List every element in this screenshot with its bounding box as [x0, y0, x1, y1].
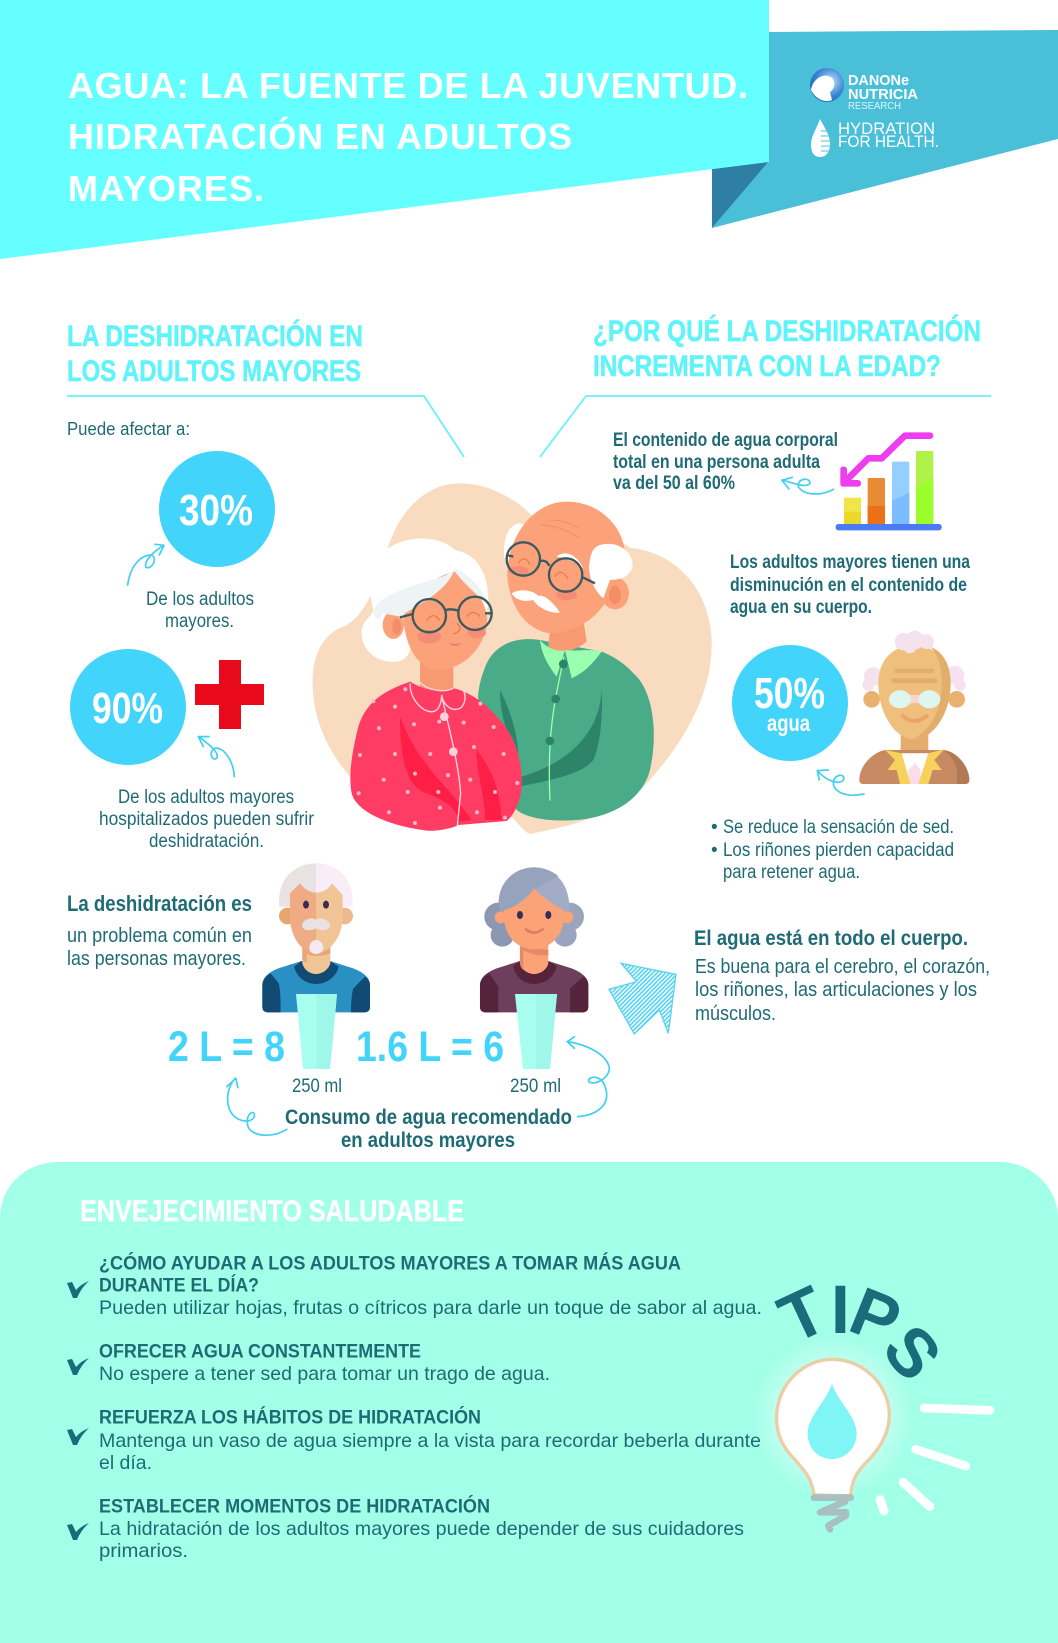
tip 1: ¿CÓMO AYUDAR A LOS ADULTOS MAYORES A TOMAR MÁS AGUA: [99, 1250, 681, 1274]
arrow: to 30%: [128, 544, 164, 585]
panel: envejecimiento saludable: [0, 1162, 1058, 1643]
heading: la deshidratación: [67, 319, 363, 388]
check mark: [67, 1523, 89, 1540]
lettering: TIPS: [768, 1272, 956, 1395]
text: hospitalizados: [99, 787, 315, 852]
text: hospitalizados: deshidratación.: [149, 831, 264, 852]
tip 3: REFUERZA LOS HÁBITOS DE HIDRATACIÓN: [99, 1404, 481, 1428]
cyan title band: [0, 0, 769, 259]
text: de los adultos mayores: mayores.: [165, 611, 234, 632]
check mark: [67, 1358, 89, 1375]
numbers: 2 L = 8: 2 L = 8: [168, 1023, 285, 1071]
text: disminución de agua: agua en su cuerpo.: [730, 597, 872, 618]
lettering: TIPS: S: [868, 1311, 956, 1395]
tip 2: OFRECER AGUA CONSTANTEMENTE: [99, 1340, 421, 1362]
text: el agua está en todo el cuerpo: [694, 926, 990, 1025]
text: de los adultos mayores: De los adultos: [146, 589, 254, 610]
icon: elderly man bust: [262, 863, 370, 1012]
tip 4: primarios.: [99, 1540, 188, 1562]
logo: Danone Nutricia Research: DANONe: [848, 72, 909, 89]
water drop: [808, 1383, 857, 1459]
numbers: 1.6 L = 6: 1.6 L = 6: [356, 1023, 504, 1071]
text: problema común: un problema común en: [67, 925, 252, 947]
title: AGUA: LA FUENTE DE LA JUVENTUD.: [68, 65, 748, 106]
text: problema común: La deshidratación es: [67, 891, 252, 916]
text: el agua está en todo el cuerpo: El agua está en todo el cuerpo.: [694, 926, 968, 950]
arrow: man to circle: [817, 770, 864, 795]
logo: Hydration for Health: FOR HEALTH.: [838, 132, 939, 151]
header banner: [0, 0, 1058, 259]
stat circle: 90%: 90%: [92, 684, 163, 733]
grandmother: [350, 539, 522, 831]
text: de los adultos mayores: [146, 589, 254, 632]
arrow: to 90%: [198, 737, 234, 777]
heading: envejecimiento saludable: ENVEJECIMIENTO SALUDABLE: [80, 1195, 464, 1228]
title: MAYORES.: [68, 168, 264, 209]
tip 4: [67, 1494, 744, 1562]
stat circle: 50% agua: 50%: [754, 669, 825, 718]
tip 4: La hidratación de los adultos mayores puede depender de sus cuidadores: [99, 1518, 744, 1540]
heading: la deshidratación: LOS ADULTOS MAYORES: [67, 355, 361, 388]
text: el agua está en todo el cuerpo: los riñones, las articulaciones y los: [695, 979, 977, 1001]
text: consumo recomendado: Consumo de agua recomendado: [285, 1105, 572, 1129]
text: problema común: las personas mayores.: [67, 948, 246, 970]
bullet list: causes: para retener agua.: [723, 862, 860, 883]
tip 3: Mantenga un vaso de agua siempre a la vista para recordar beberla durante: [99, 1430, 761, 1452]
illustration: tips light bulb: [751, 1272, 990, 1529]
bullet list: causes: Se reduce la sensación de sed.: [723, 817, 954, 838]
lettering: TIPS: T: [768, 1272, 838, 1358]
text: consumo recomendado: [285, 1105, 572, 1152]
text: consumo recomendado: en adultos mayores: [341, 1128, 515, 1152]
check mark: [67, 1281, 89, 1298]
light rays: [880, 1408, 990, 1511]
logo: Hydration for Health: [811, 119, 939, 157]
stat circle: 30%: 30%: [179, 486, 253, 535]
illustration: elderly couple: [313, 483, 712, 834]
icon: bar chart with falling arrow: [836, 436, 942, 530]
bullet list: causes: •: [711, 817, 718, 838]
text: contenido de agua corporal: total en una persona adulta: [613, 452, 820, 473]
icon: elderly man with glasses: [859, 631, 969, 784]
peach blob: [313, 483, 712, 834]
logos: [810, 68, 939, 157]
bullet list: causes: Los riñones pierden capacidad: [723, 840, 954, 861]
bulb glow: [751, 1335, 914, 1498]
check mark: [67, 1428, 89, 1445]
text: el agua está en todo el cuerpo: Es buena para el cerebro, el corazón,: [695, 956, 990, 978]
grandfather: [478, 502, 654, 821]
arrow: right curl: [567, 1037, 609, 1117]
heading: por qué: [593, 314, 981, 383]
icon: water glass 2: [515, 994, 557, 1069]
text: disminución de agua: [730, 552, 970, 618]
bullet list: causes: •: [711, 840, 718, 861]
lettering: TIPS: I: [831, 1272, 850, 1348]
tip 2: No espere a tener sed para tomar un trago de agua.: [99, 1363, 550, 1385]
icon: water glass 1: [296, 994, 337, 1069]
lettering: TIPS: P: [840, 1273, 911, 1360]
heading: la deshidratación: LA DESHIDRATACIÓN EN: [67, 319, 363, 353]
bulb: [777, 1359, 889, 1496]
text: contenido de agua corporal: va del 50 al 60%: [613, 473, 735, 494]
text: problema común: [67, 891, 252, 970]
stat circle: 90%: [70, 649, 186, 765]
icon: elderly woman bust: [480, 867, 588, 1012]
text: hospitalizados: De los adultos mayores: [118, 787, 294, 808]
ribbon fold: [712, 161, 769, 228]
tip 4: ESTABLECER MOMENTOS DE HIDRATACIÓN: [99, 1494, 490, 1518]
logo: Danone Nutricia Research: RESEARCH: [848, 101, 901, 112]
logo: Danone Nutricia Research: [810, 68, 918, 112]
tip 1: DURANTE EL DÍA?: [99, 1274, 259, 1296]
arrow: left curl: [227, 1078, 287, 1135]
title: [68, 65, 748, 209]
text: disminución de agua: disminución en el contenido de: [730, 575, 967, 596]
tip 2: [67, 1340, 550, 1385]
text: contenido de agua corporal: [613, 430, 838, 494]
tip 3: [67, 1404, 761, 1474]
heading: por qué: INCREMENTA CON LA EDAD?: [593, 350, 941, 383]
text: disminución de agua: Los adultos mayores tienen una: [730, 552, 970, 573]
stat circle: 50% agua: [732, 645, 848, 761]
label: 250 ml left: 250 ml: [292, 1075, 342, 1097]
tip 1: Pueden utilizar hojas, frutas o cítricos para darle un toque de sabor al agua.: [99, 1297, 762, 1319]
bulb base: [814, 1498, 851, 1529]
logo: Hydration for Health: HYDRATION: [838, 119, 935, 138]
text: contenido de agua corporal: El contenido de agua corporal: [613, 430, 838, 451]
logo: Danone Nutricia Research: NUTRICIA: [848, 86, 918, 103]
title: HIDRATACIÓN EN ADULTOS: [68, 115, 572, 157]
text: hospitalizados: hospitalizados pueden sufrir: [99, 809, 315, 830]
stat circle: 50% agua: agua: [767, 710, 810, 736]
stat circle: 30%: [159, 451, 275, 567]
arrow: hatched pointer: [609, 963, 676, 1034]
tip 1: [67, 1250, 762, 1319]
bullet list: causes: [711, 817, 954, 883]
tip 3: el día.: [99, 1452, 152, 1474]
teal logo ribbon: [712, 30, 1058, 228]
arrow: chart to text: [782, 477, 833, 494]
text: puede afectar: Puede afectar a:: [67, 418, 190, 439]
text: el agua está en todo el cuerpo: músculos.: [695, 1003, 776, 1025]
label: 250 ml right: 250 ml: [510, 1075, 561, 1097]
icon: red cross: [195, 660, 264, 729]
